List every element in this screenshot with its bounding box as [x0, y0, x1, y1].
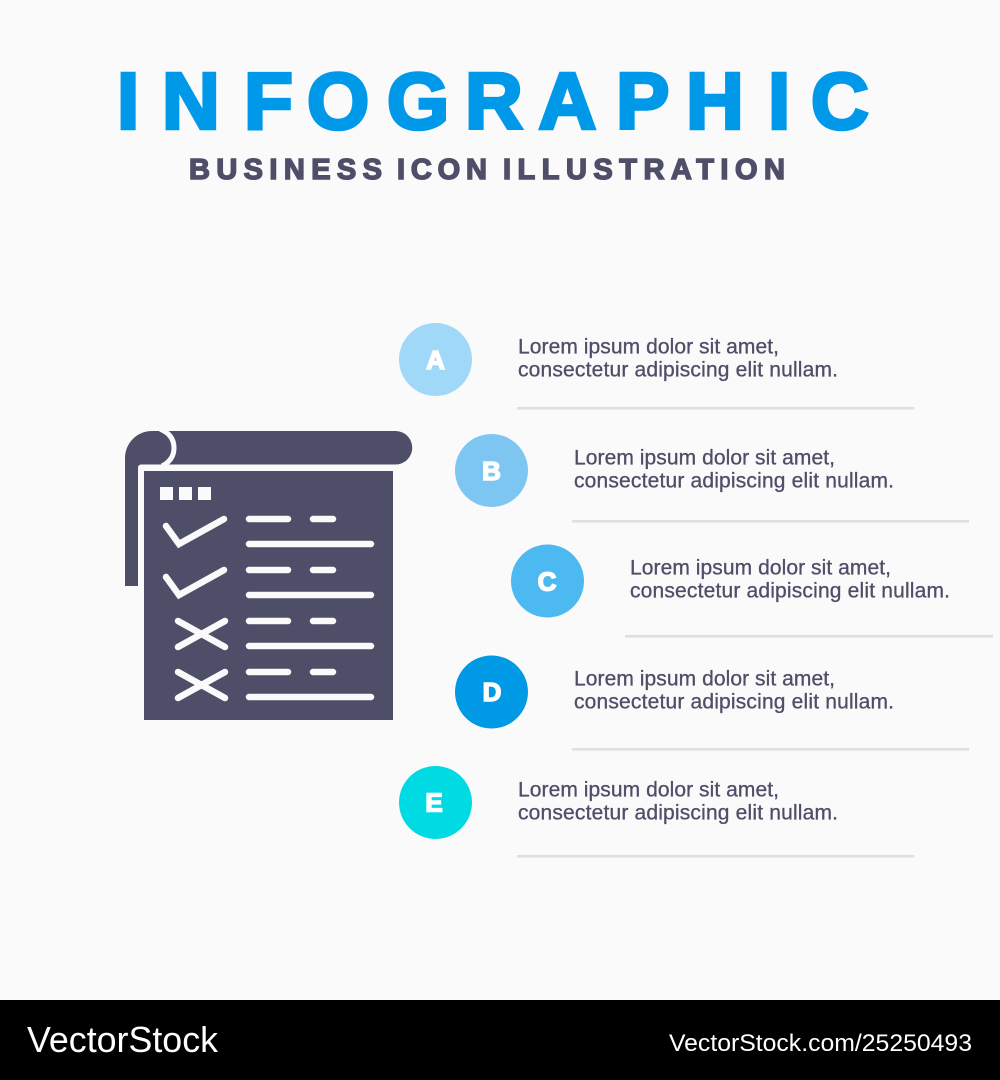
text C: Lorem ipsum dolor sit amet, [630, 556, 891, 580]
icon: checklist document [125, 429, 412, 720]
badge B [455, 434, 528, 507]
text C: consectetur adipiscing elit nullam. [630, 580, 950, 602]
item C [511, 544, 993, 638]
text A: Lorem ipsum dolor sit amet, [518, 336, 779, 358]
check marks [166, 519, 224, 595]
badge D [455, 656, 528, 728]
window dots [160, 487, 211, 500]
badge B: B [482, 456, 501, 486]
item E [399, 766, 914, 858]
item B [455, 434, 969, 522]
checklist panel [144, 471, 393, 720]
item D [455, 656, 969, 750]
scroll roll and top bar [125, 431, 412, 586]
subtitle: ILLUSTRATION [503, 154, 785, 186]
badge D: D [483, 677, 501, 707]
scroll roll edge [160, 429, 174, 466]
title: INFOGRAPHIC [117, 56, 869, 146]
subtitle: ICON [397, 154, 487, 186]
badge C: C [538, 566, 557, 596]
cross marks [178, 621, 225, 698]
text B: consectetur adipiscing elit nullam. [574, 470, 894, 492]
text D: Lorem ipsum dolor sit amet, [574, 668, 835, 690]
badge A [399, 323, 472, 396]
text E: Lorem ipsum dolor sit amet, [518, 778, 779, 802]
footer logo: VectorStock [27, 1019, 219, 1060]
badge A: A [426, 345, 445, 375]
text B: Lorem ipsum dolor sit amet, [574, 446, 835, 470]
subtitle: BUSINESS [189, 154, 382, 186]
text E: consectetur adipiscing elit nullam. [518, 802, 838, 824]
list lines [249, 519, 371, 697]
badge E: E [425, 788, 443, 818]
item A [399, 323, 914, 410]
badge E [399, 766, 472, 839]
text D: consectetur adipiscing elit nullam. [574, 690, 894, 714]
badge C [511, 544, 584, 618]
text A: consectetur adipiscing elit nullam. [518, 358, 838, 382]
footer id: VectorStock.com/25250493 [669, 1030, 972, 1057]
footer bar [0, 1000, 1000, 1080]
